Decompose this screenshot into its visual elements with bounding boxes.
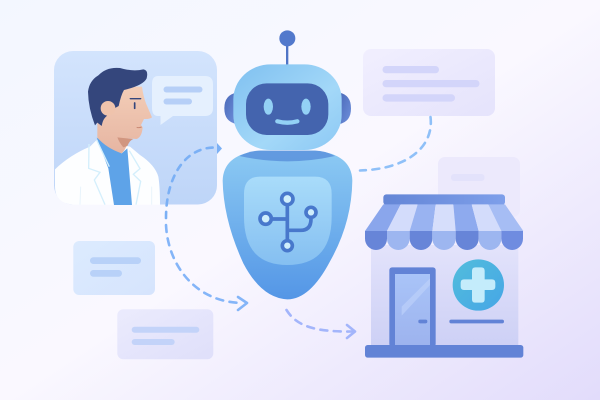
- building base: [365, 345, 523, 358]
- card: left middle: [73, 241, 155, 295]
- robot: [223, 30, 352, 299]
- card: behind pharmacy: [438, 157, 520, 217]
- robot head: [233, 64, 342, 150]
- pharmacy: [365, 194, 523, 358]
- chest plate: [244, 177, 332, 265]
- sign line: [449, 320, 504, 323]
- arrow: robot to pharmacy: [286, 310, 355, 338]
- doctor figure: [55, 68, 160, 205]
- robot antenna: [279, 30, 295, 67]
- card: top right: [363, 49, 495, 116]
- building wall: [371, 245, 518, 347]
- card: left bottom: [117, 309, 213, 359]
- awning: [365, 194, 523, 250]
- medical cross sign: [453, 259, 504, 311]
- robot face screen: [246, 83, 328, 135]
- robot body: [223, 151, 352, 299]
- arrow: to robot base: [166, 225, 247, 310]
- arrow: doctor to robot: [166, 143, 222, 218]
- door: [389, 267, 436, 347]
- panel: doctor: [54, 51, 217, 205]
- arrow: robot to top card: [360, 117, 431, 170]
- circuit icon: [260, 193, 316, 251]
- speech bubble: [152, 76, 213, 125]
- robot ears: [224, 93, 351, 124]
